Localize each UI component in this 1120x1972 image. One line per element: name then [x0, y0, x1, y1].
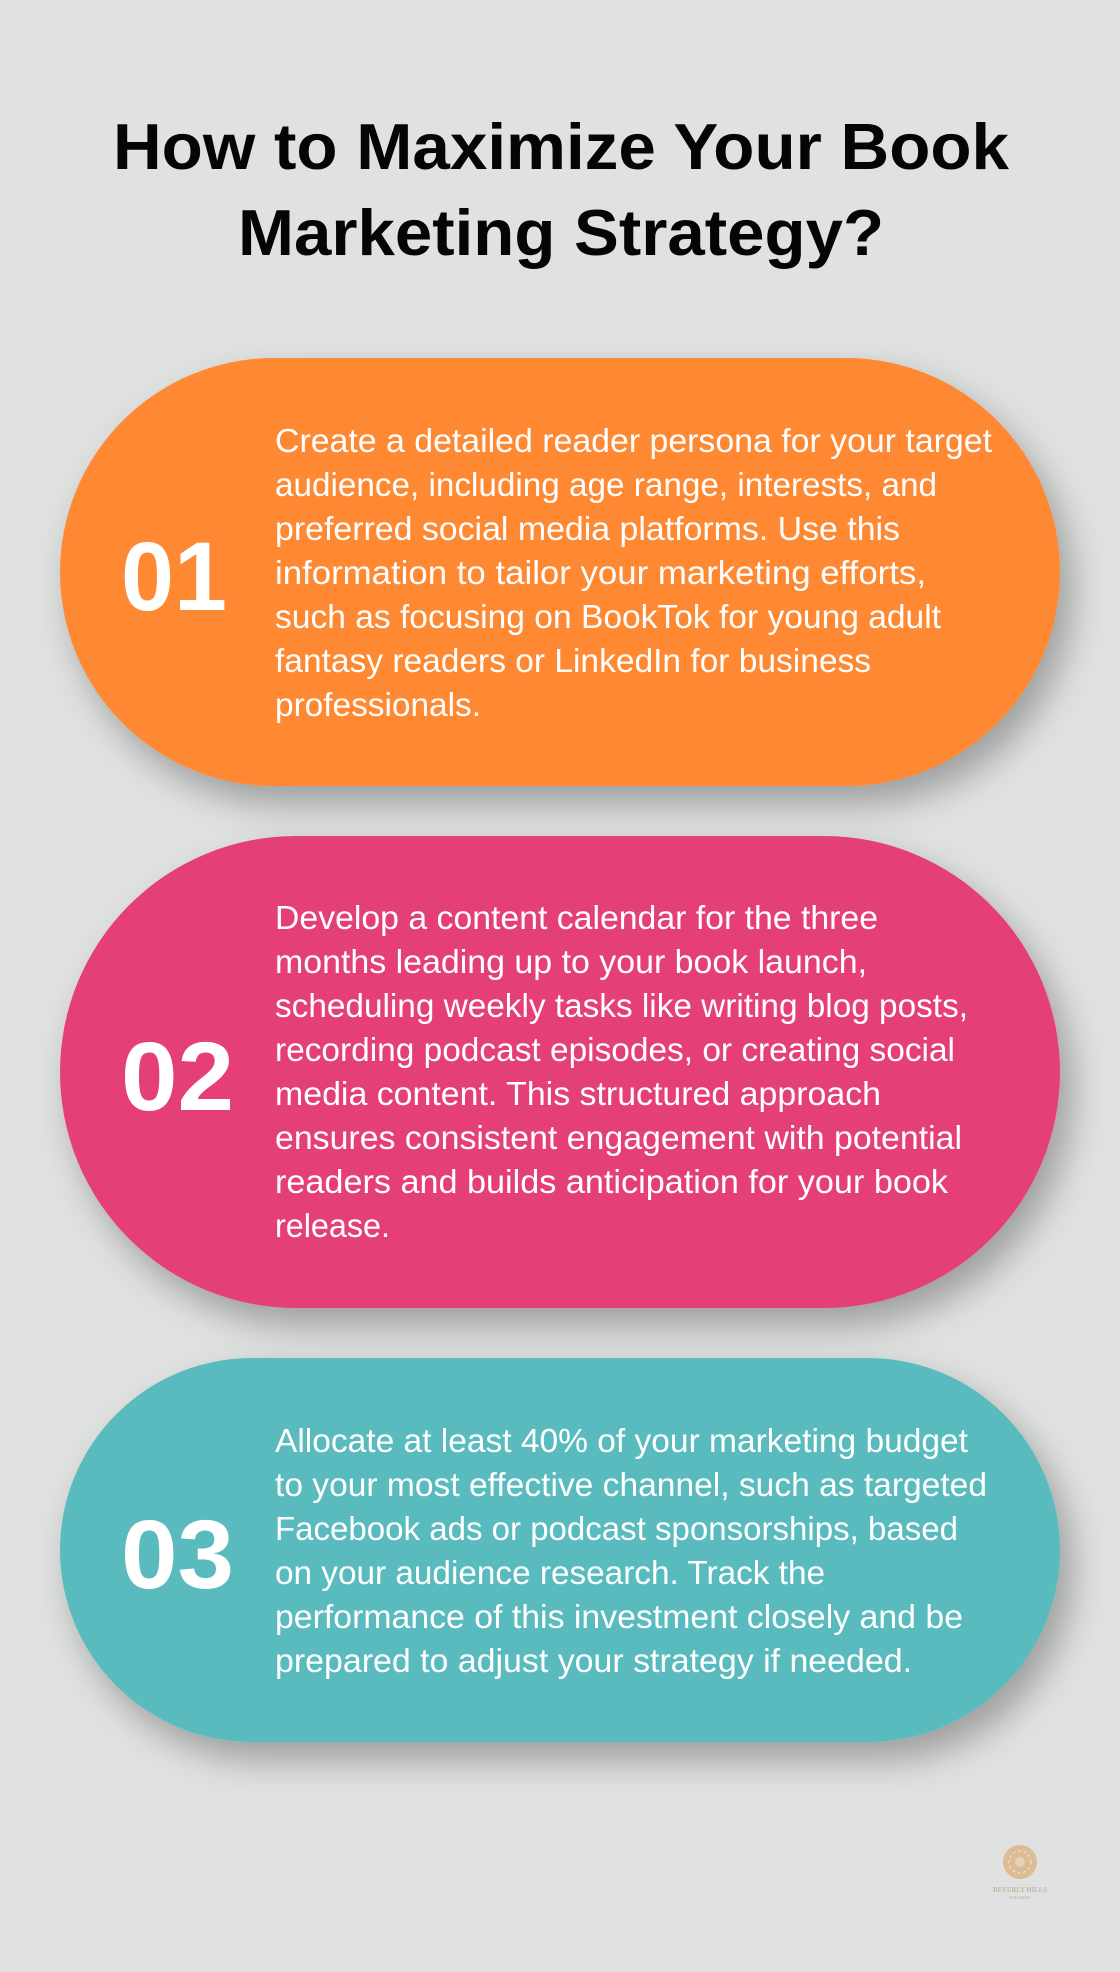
panel: step 03 [60, 1358, 1060, 1742]
orange pill background [60, 358, 1060, 786]
pink pill background [60, 836, 1060, 1308]
panel: step 02 [60, 836, 1060, 1308]
step 03 text: to your most effective channel, such as targeted [275, 1467, 987, 1504]
step 03 text: Allocate at least 40% of your marketing budget [275, 1423, 969, 1460]
step 03 text: Facebook ads or podcast sponsorships, based [275, 1511, 958, 1548]
icon: gold mandala [1003, 1845, 1037, 1879]
step 02 text: media content. This structured approach [275, 1076, 881, 1113]
step 03 text: prepared to adjust your strategy if needed. [275, 1643, 912, 1680]
number 01: 01 [121, 522, 227, 631]
step 02 text: readers and builds anticipation for your book [275, 1164, 948, 1201]
step 02 text: scheduling weekly tasks like writing blog posts, [275, 988, 968, 1025]
logo wordmark: BEVERLY HILLS [993, 1885, 1047, 1894]
step 01 text [275, 423, 993, 724]
step 02 text: release. [275, 1208, 390, 1245]
step 03 text: performance of this investment closely and be [275, 1599, 963, 1636]
step 02 text: months leading up to your book launch, [275, 944, 867, 981]
step 03 text [275, 1423, 987, 1680]
step 01 text: preferred social media platforms. Use this [275, 511, 900, 548]
number 03: 03 [121, 1500, 234, 1609]
panel: step 01 [60, 358, 1060, 786]
step 01 text: Create a detailed reader persona for your target [275, 423, 993, 460]
number 02: 02 [121, 1022, 234, 1131]
logo: Beverly Hills Publishing [993, 1845, 1047, 1900]
step 02 text: Develop a content calendar for the three [275, 900, 878, 937]
step 03 text: on your audience research. Track the [275, 1555, 825, 1592]
step 02 text [275, 900, 968, 1245]
step 01 text: professionals. [275, 687, 481, 724]
title: Marketing Strategy? [238, 196, 884, 269]
step 01 text: such as focusing on BookTok for young adult [275, 599, 942, 636]
title [113, 110, 1010, 269]
step 01 text: fantasy readers or LinkedIn for business [275, 643, 871, 680]
logo subtitle: PUBLISHING [1009, 1895, 1032, 1900]
step 01 text: audience, including age range, interests, and [275, 467, 937, 504]
title: How to Maximize Your Book [113, 110, 1010, 183]
step 01 text: information to tailor your marketing efforts, [275, 555, 926, 592]
step 02 text: ensures consistent engagement with potential [275, 1120, 962, 1157]
step 02 text: recording podcast episodes, or creating social [275, 1032, 955, 1069]
teal pill background [60, 1358, 1060, 1742]
